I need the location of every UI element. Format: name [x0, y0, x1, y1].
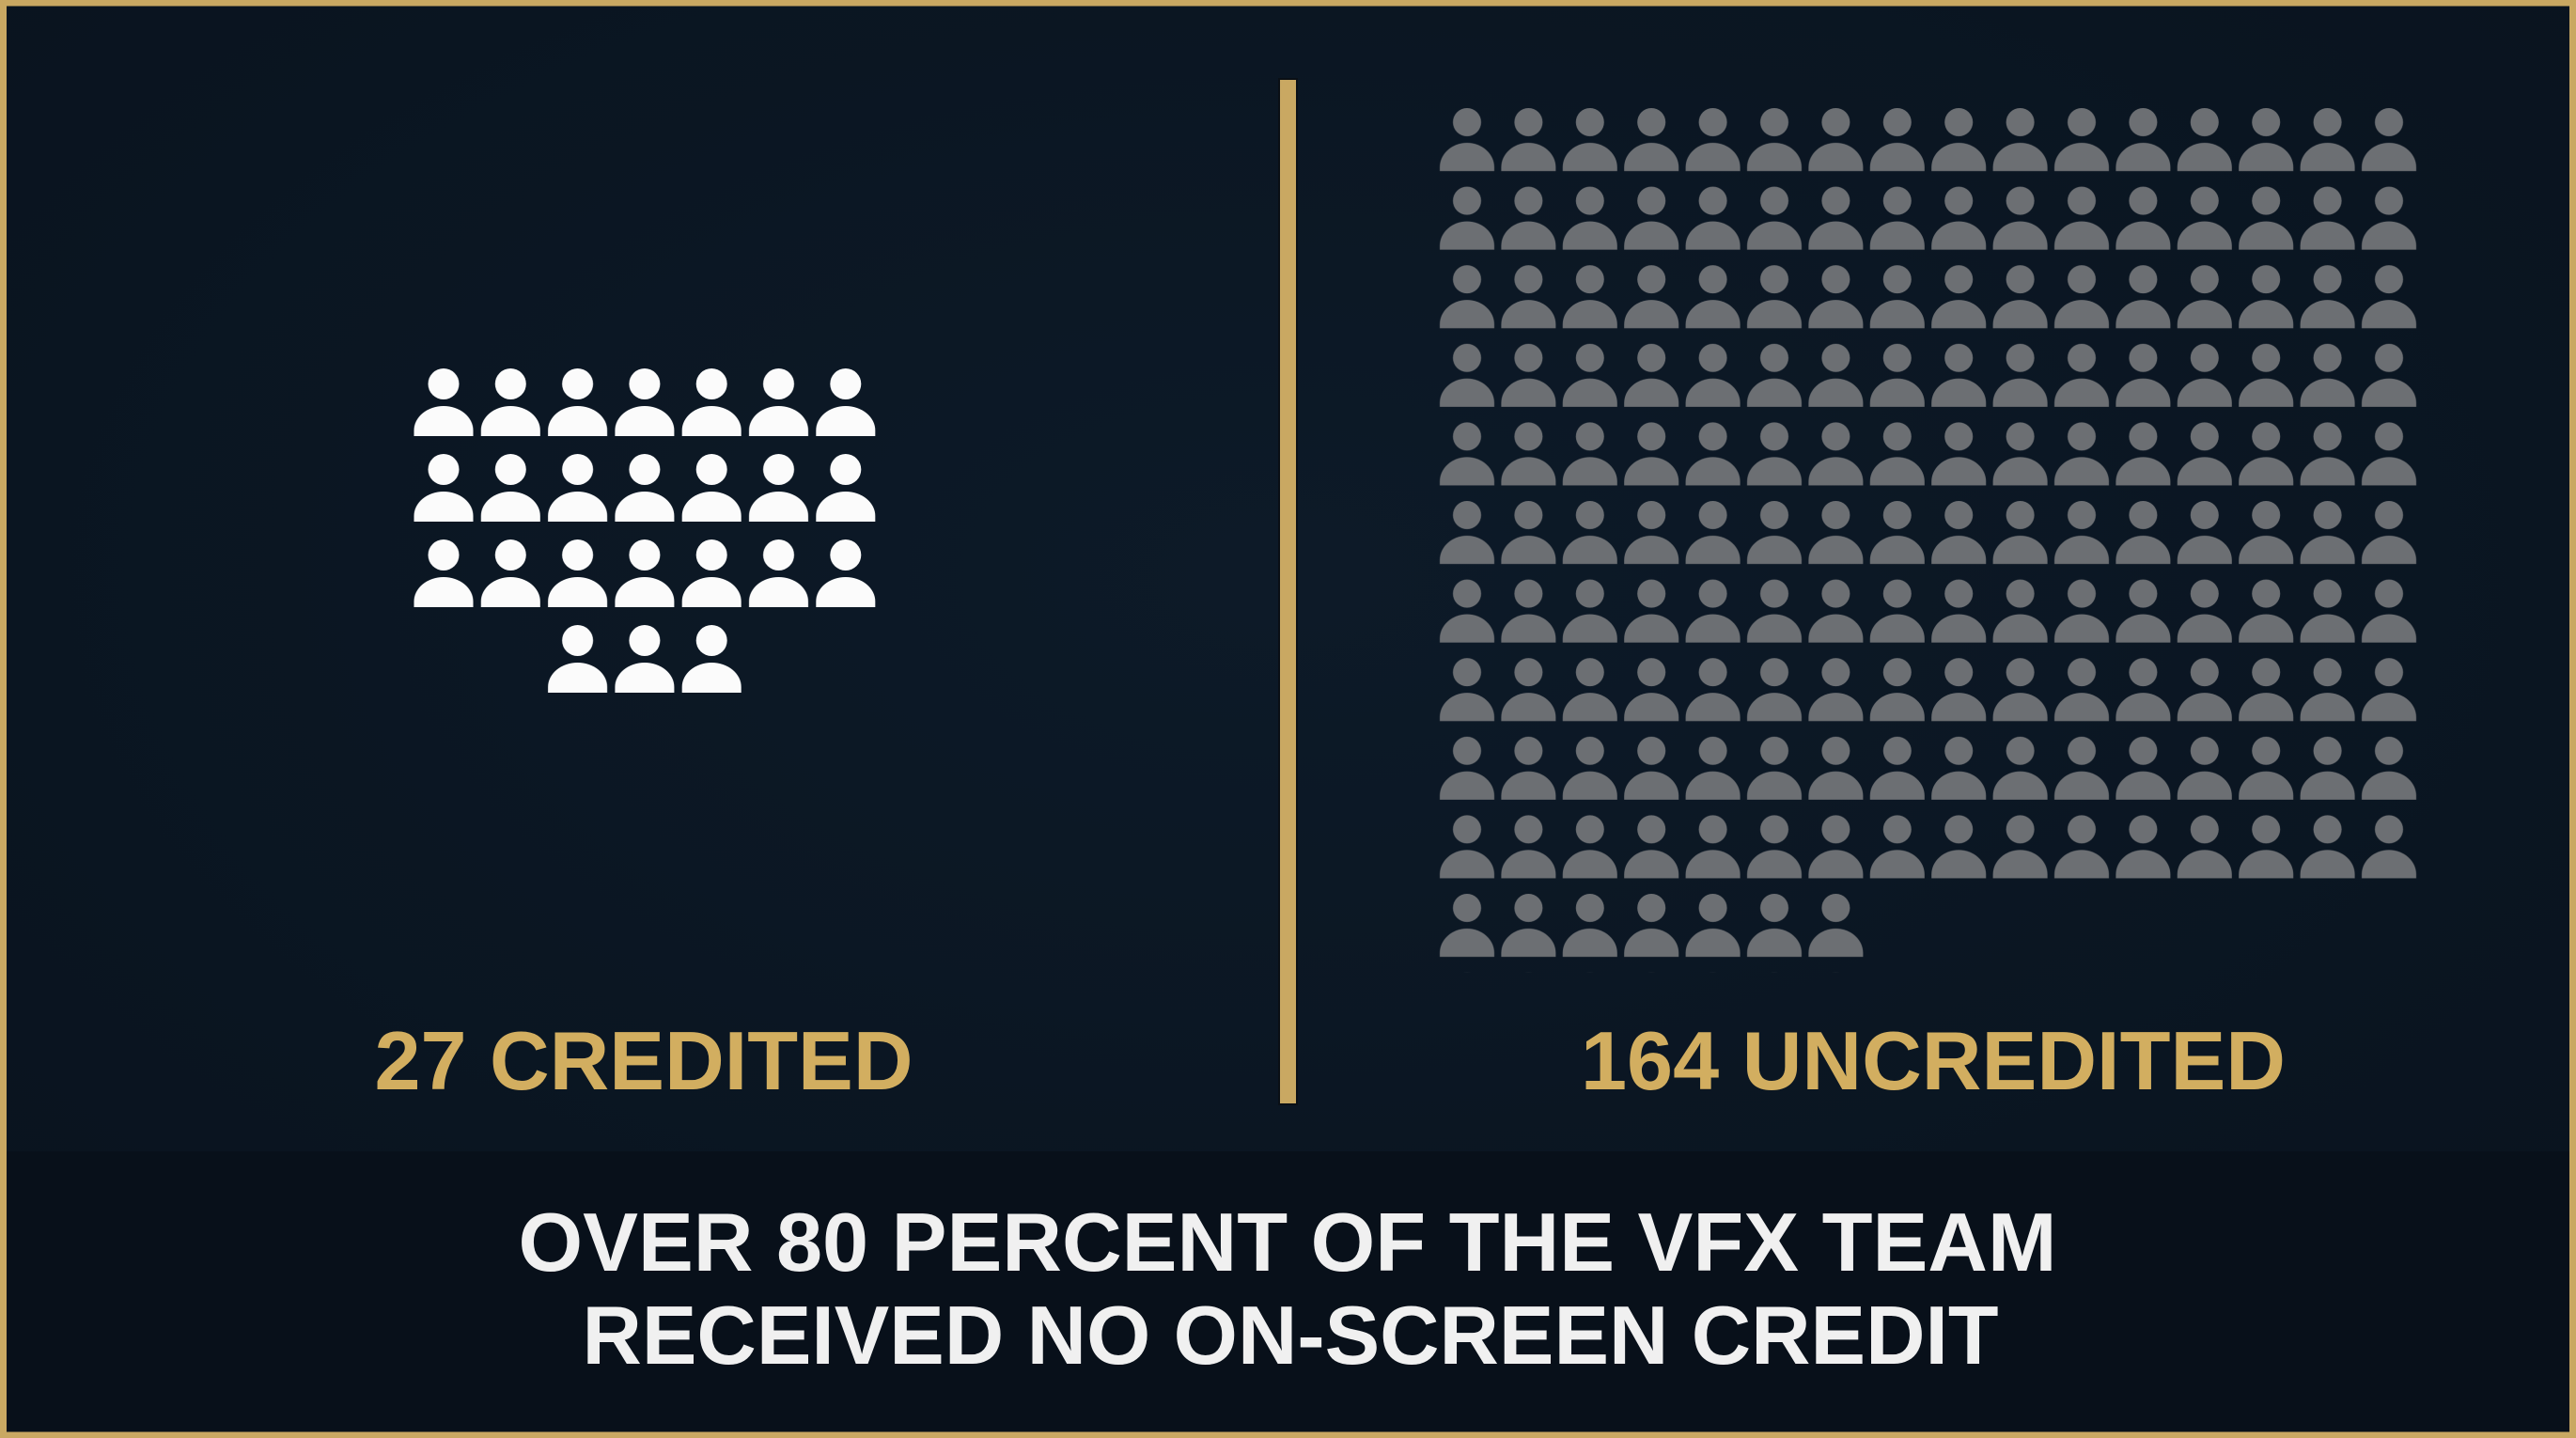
uncredited icon group: [1436, 108, 2420, 973]
bottom statement: OVER 80 PERCENT OF THE VFX TEAM: [519, 1196, 2056, 1289]
credited icon group: [410, 365, 879, 707]
bottom statement: RECEIVED NO ON-SCREEN CREDIT: [583, 1289, 1998, 1382]
bottom band: [0, 1151, 2576, 1438]
divider: [1279, 79, 1297, 1104]
label: 164 uncredited: 164 UNCREDITED: [1581, 1014, 2286, 1107]
label: 27 credited: 27 CREDITED: [374, 1014, 913, 1107]
bottom statement: [519, 1196, 2056, 1382]
